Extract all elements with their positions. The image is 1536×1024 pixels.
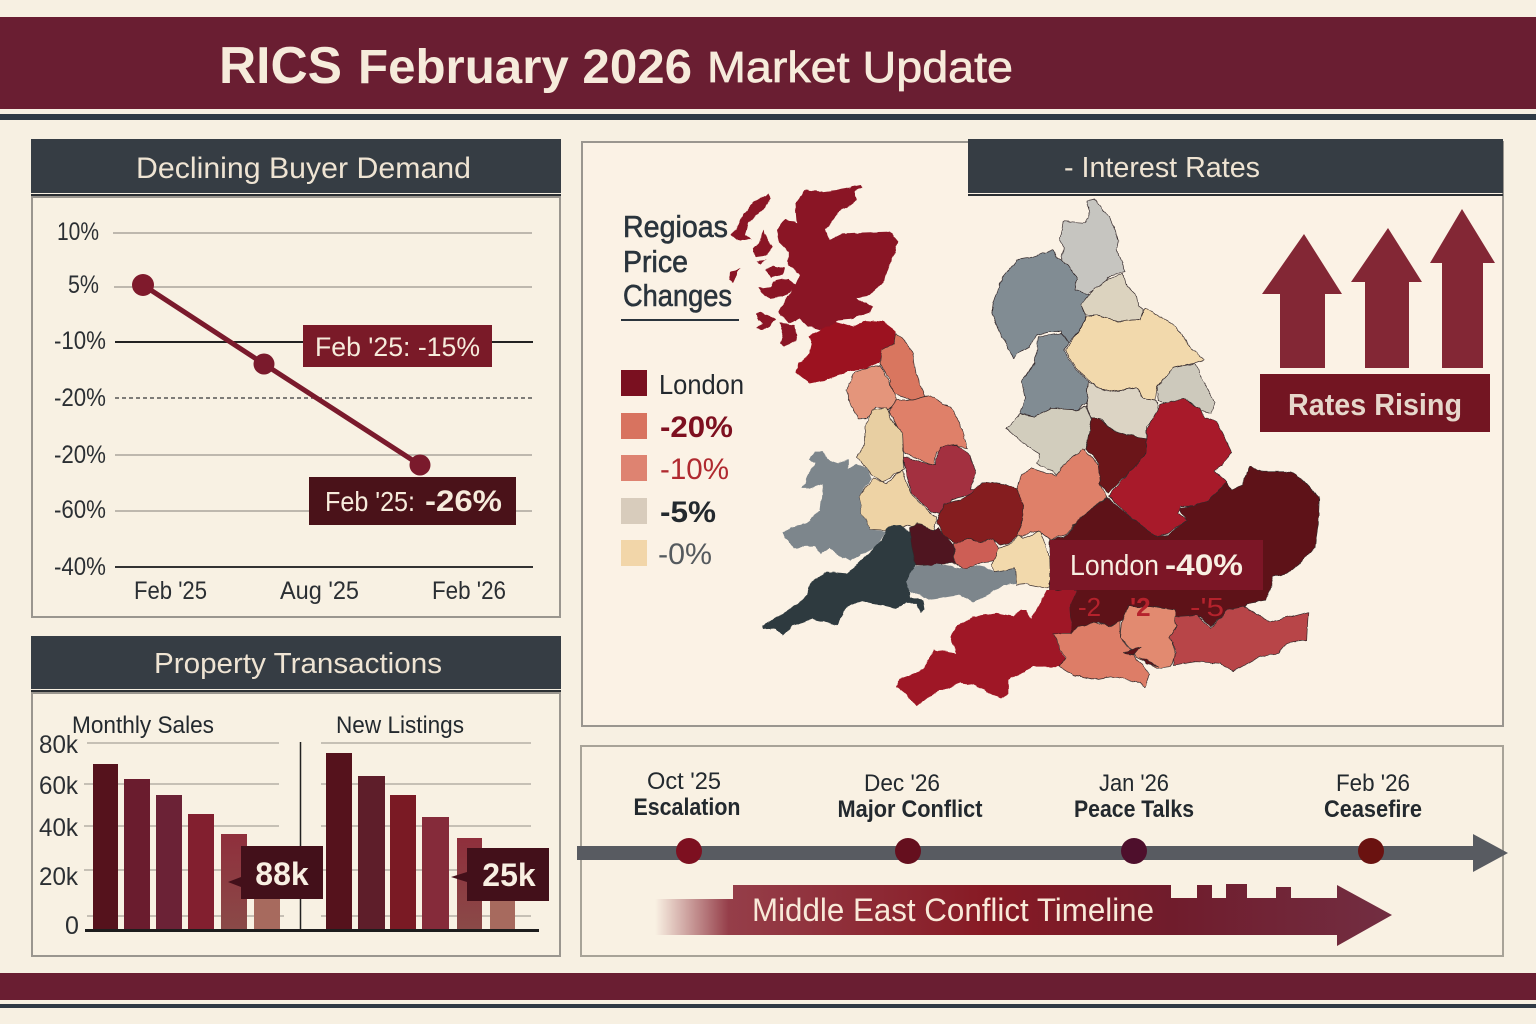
map right: east and south regions	[1015, 398, 1319, 633]
map overlay labels: -'5	[1190, 592, 1224, 622]
callout: 25k	[451, 848, 549, 901]
map	[729, 185, 1319, 707]
label: rates rising	[1260, 374, 1490, 432]
heading: property transactions: Property Transactions	[154, 648, 442, 680]
map right: south coast regions	[1053, 607, 1308, 687]
legend heading: Regioas	[623, 209, 728, 244]
label: new listings: New Listings	[336, 712, 464, 739]
legend heading: Price	[623, 244, 688, 279]
event: major conflict: Major Conflict	[838, 796, 983, 823]
bar chart: 40k	[39, 814, 78, 842]
line chart: -60%	[54, 496, 106, 524]
map overlay labels: -2	[1078, 592, 1101, 622]
heading: declining buyer demand	[31, 139, 561, 196]
title: February 2026	[358, 41, 692, 94]
heading: property transactions	[31, 636, 561, 692]
legend heading	[621, 209, 739, 321]
callout: feb 25 -26%	[309, 477, 516, 525]
callout: london -40%: London	[1070, 550, 1159, 582]
event: peace talks	[1074, 770, 1194, 864]
timeline arrow	[577, 834, 1508, 872]
map centre: midlands and south west coast	[896, 483, 1077, 707]
bar chart: 60k	[39, 772, 78, 800]
panel: property transactions	[31, 636, 561, 956]
title: Market Update	[707, 43, 1013, 92]
map left: wales and south west regions	[762, 445, 1017, 635]
bar chart: 20k	[39, 863, 78, 891]
callout: london -40%: -40%	[1165, 549, 1243, 582]
map left: north regions and islands	[729, 185, 968, 482]
legend heading: Changes	[623, 278, 732, 313]
legend: London	[659, 369, 744, 400]
legend: -10%	[660, 453, 729, 486]
panel: middle east conflict timeline	[577, 746, 1508, 956]
callout: 88k: 88k	[255, 856, 309, 892]
legend	[621, 369, 744, 571]
event: major conflict	[838, 770, 983, 864]
callout: feb 25 -15%	[303, 325, 492, 367]
icon: rising arrows	[1262, 209, 1495, 368]
line chart: -20%	[54, 441, 106, 469]
event: major conflict: Dec '26	[864, 770, 940, 797]
event: ceasefire: Feb '26	[1336, 770, 1410, 797]
line chart: Feb '25	[134, 577, 207, 605]
heading: declining buyer demand: Declining Buyer Demand	[136, 152, 471, 185]
legend: -0%	[658, 538, 712, 571]
map overlay labels	[1078, 592, 1224, 622]
bar chart: 80k	[39, 731, 78, 759]
heading: interest rates	[968, 139, 1503, 196]
line chart: -20%	[54, 384, 106, 412]
event: peace talks: Jan '26	[1099, 770, 1169, 797]
callout: feb 25 -26%: -26%	[425, 485, 502, 518]
event: escalation: Escalation	[634, 794, 740, 821]
event: ceasefire: Ceasefire	[1324, 796, 1422, 823]
line chart: -10%	[54, 327, 106, 355]
label: monthly sales: Monthly Sales	[72, 712, 214, 739]
callout: 88k	[228, 846, 323, 899]
line chart: Aug '25	[280, 577, 359, 605]
bars: new listings	[326, 753, 515, 930]
bars: monthly sales	[93, 764, 280, 930]
legend: -20%	[660, 411, 733, 444]
title	[219, 37, 1013, 95]
event: escalation: Oct '25	[647, 768, 721, 795]
line chart	[54, 218, 533, 605]
line chart: 5%	[68, 271, 99, 299]
event: escalation	[634, 768, 740, 864]
banner arrow: middle east conflict timeline	[655, 884, 1392, 946]
title: RICS	[219, 37, 342, 95]
panel: regional price changes map	[582, 139, 1503, 726]
line chart: 10%	[57, 218, 99, 246]
banner arrow: middle east conflict timeline: Middle East Conflict Timeline	[752, 892, 1154, 928]
map right: north and midlands regions	[992, 200, 1215, 475]
bar chart	[39, 712, 549, 940]
heading: interest rates: - Interest Rates	[1064, 152, 1260, 184]
event: ceasefire	[1324, 770, 1422, 864]
map overlay labels: '2	[1130, 592, 1151, 622]
bar chart: 0	[65, 912, 79, 940]
header banner	[0, 17, 1536, 120]
callout: london -40%	[1050, 540, 1263, 590]
line chart: Feb '26	[432, 577, 506, 605]
footer band	[0, 973, 1536, 1008]
panel: declining buyer demand	[31, 139, 561, 617]
line chart: -40%	[54, 553, 106, 581]
legend: -5%	[660, 496, 716, 529]
callout: feb 25 -15%: Feb '25: -15%	[315, 332, 480, 362]
event: peace talks: Peace Talks	[1074, 796, 1194, 823]
label: rates rising: Rates Rising	[1288, 387, 1462, 422]
callout: 25k: 25k	[482, 857, 536, 893]
callout: feb 25 -26%: Feb '25:	[325, 486, 415, 517]
